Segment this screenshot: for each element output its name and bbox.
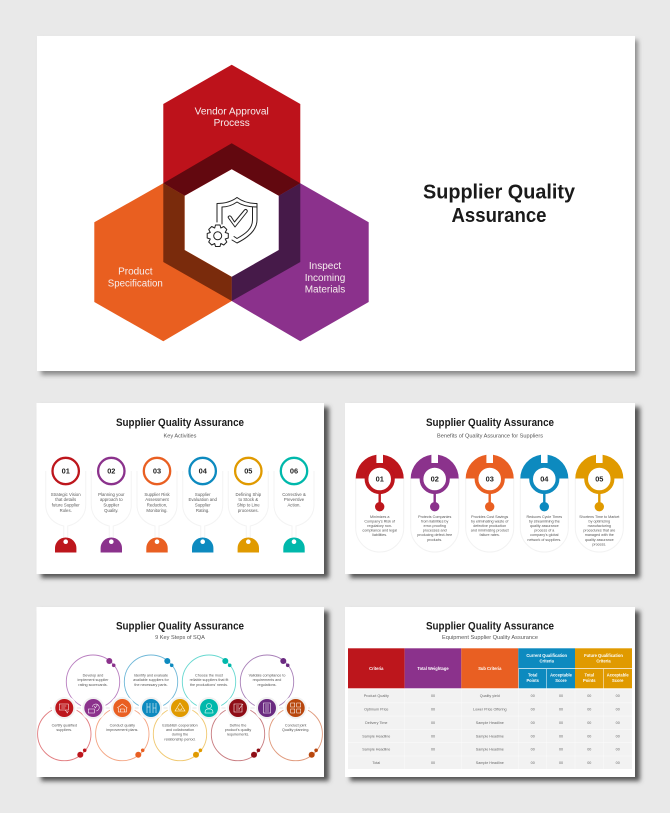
icon: joint planning grid [283,696,308,720]
hexagon: vendor approval process: Process [214,118,250,129]
icon: collaboration [168,696,192,720]
benefit 05: process. [592,542,606,546]
heading: benefits: Supplier Quality Assurance [426,417,554,429]
step ring: certify qualified suppliers: suppliers. [56,728,72,732]
row: sample headline a [362,734,620,738]
benefit 03 [466,455,514,552]
hexagon: inspect incoming materials: Inspect [309,261,341,272]
activity 04: 04 [199,467,208,476]
row: sample headline a: 00 [616,734,620,738]
step ring: develop rating scorecards [66,655,120,708]
icon: certificate [52,696,77,720]
activity 05: Ship to Line [237,502,260,508]
row: total [372,761,620,765]
benefit 01: Company's Risk of [364,520,396,524]
activity 02: approach to [100,497,123,502]
activity 03: Supplier Risk [144,492,171,497]
step ring: choose reliable suppliers: reliable suppliers that fit [190,678,228,682]
table header: Points [526,678,540,683]
activity 06: Action. [287,502,301,508]
benefit 02: from liabilities by [421,520,448,524]
heading: key activities: Key Activities [164,434,197,440]
benefit 02: error-proofing [424,524,446,528]
row: total: 00 [616,761,620,765]
benefit 02: products. [427,538,442,542]
heading: nine key steps: 9 Key Steps of SQA [155,635,205,641]
activity 01: Strategic Vision [51,492,81,497]
activity 04 [183,458,223,552]
row: sample headline b [362,748,620,752]
activity 05 [228,458,268,552]
benefit 04 [520,455,568,552]
row: sample headline b: 00 [616,748,620,752]
step ring: conduct joint planning [269,707,322,761]
panel: equipment table slide [345,607,640,781]
activity 02: Planning your [98,492,125,497]
step ring: validate compliance: Validate compliance to [249,674,285,678]
hexagon: product specification: Specification [108,278,163,290]
benefit 05: manufacturing [588,524,611,528]
row: product quality: Quality yield [480,694,500,698]
title: supplier quality assurance [423,182,576,227]
step ring: establish cooperation [153,707,207,761]
row: total: Sample Headline [476,761,504,765]
table header: Total Weightage [417,666,449,671]
activity 06: Corrective & [282,492,306,497]
activity 01: 01 [62,467,70,476]
step ring: conduct quality improvement [96,707,149,761]
table header: Criteria [596,658,611,664]
benefit 04: process of a [534,529,555,533]
row: product quality: 00 [531,694,535,698]
heading: equipment supplier [426,620,554,641]
step ring: develop rating scorecards: rating scorecards. [78,683,108,687]
table header: Acceptable [607,672,629,678]
step ring: identify and evaluate suppliers [124,655,178,708]
icon: quality building [110,696,135,720]
step ring: choose reliable suppliers [182,655,236,708]
benefit 02: producing defect-free [417,533,452,537]
step ring: identify and evaluate suppliers: Identify and evaluate [134,674,168,678]
activity 03: Reduction, [147,502,167,508]
benefit 05: Shortens Time to Market [579,515,619,519]
step ring: identify and evaluate suppliers: available suppliers for [133,678,170,682]
row: total: 00 [531,761,535,765]
row: optimum price: 00 [616,708,620,712]
row: delivery time: 00 [431,721,435,725]
step ring: establish cooperation: and collaboration [166,728,194,732]
row: product quality: 00 [559,694,563,698]
row: product quality: 00 [587,694,591,698]
row: optimum price: 00 [431,708,435,712]
activity 04: Supplier [195,502,211,508]
step ring: certify qualified suppliers [38,707,91,761]
center white hexagon [185,169,279,277]
row: delivery time: 00 [587,721,591,725]
benefit 03: and minimizing product [471,529,509,533]
overlap: dark orange segment [163,183,232,301]
row: delivery time [365,721,620,725]
overlap: dark purple segment [232,183,300,301]
row: delivery time: Delivery Time [365,721,387,725]
table header: Criteria [369,666,384,671]
activity 06 [274,458,314,552]
hexagon: product specification [94,183,232,341]
row: total: 00 [431,761,435,765]
panel: benefits slide [345,403,640,578]
benefit 04: 04 [540,475,549,484]
step ring: validate compliance: regulations. [257,683,277,687]
icon row: nine step badges [50,696,310,720]
panel: hexagon overview slide [37,36,638,375]
step ring: define quality requirements: product's quality [225,728,251,732]
heading: nine key steps: Supplier Quality Assurance [116,620,244,632]
row: sample headline b: 00 [431,748,435,752]
title: supplier quality assurance: Supplier Quality [423,182,576,204]
benefit 01: regulatory non- [367,524,393,528]
hexagon: inspect incoming materials: Incoming [305,273,345,284]
activity 06: 06 [290,467,298,476]
row: product quality: 00 [616,694,620,698]
hexagon: vendor approval process [163,65,300,223]
row: optimum price: 00 [587,708,591,712]
activity 02 [91,458,131,552]
benefit 03: defective production [473,524,506,528]
table header: Sub Criteria [478,666,502,671]
heading: nine key steps [116,620,244,641]
benefit 03: failure rates. [480,533,500,537]
table header: Total [585,672,594,678]
row: sample headline a: 00 [431,734,435,738]
table header: Score [555,678,567,683]
row: delivery time: 00 [559,721,563,725]
row: total: Total [372,761,380,765]
benefit 02: processes and [423,529,447,533]
overlap: dark red segment [163,143,300,196]
benefit 03: 03 [486,475,494,484]
row: optimum price [364,708,620,712]
activity 01: Roles. [60,508,72,513]
icon: scorecard [81,696,106,720]
heading: equipment supplier: Equipment Supplier Quality Assurance [442,635,538,641]
step ring: conduct joint planning: Quality planning. [282,728,309,732]
step ring: develop rating scorecards: implement supplier [78,678,109,682]
benefit 01 [356,455,404,552]
step ring: conduct quality improvement: improvement plans. [106,728,138,732]
row: optimum price: 00 [531,708,535,712]
icon: compliance checklist [254,696,280,720]
title: supplier quality assurance: Assurance [452,205,546,227]
row: sample headline b: Sample Headline [476,748,504,752]
activity 05: Defining Ship [236,492,262,497]
step ring: define quality requirements [211,707,265,761]
benefit 05 [575,455,623,552]
step ring: establish cooperation: Establish cooperation [162,724,198,728]
activity 04: Rating. [196,508,210,513]
benefit 04: network of suppliers. [527,538,561,542]
hexagon: product specification: Product [118,266,153,278]
step ring: define quality requirements: requirements. [227,733,249,737]
row: sample headline a: 00 [531,734,535,738]
heading: key activities: Supplier Quality Assurance [116,417,244,429]
row: sample headline a: 00 [559,734,563,738]
table header: Current Qualification [526,653,568,658]
step ring: choose reliable suppliers: Choose the most [195,674,223,678]
row: delivery time: 00 [531,721,535,725]
benefit 04: by streamlining the [529,520,560,524]
icon: supplier person [196,696,222,720]
benefit 03: by eliminating waste of [471,520,509,524]
step ring: identify and evaluate suppliers: the necessary parts. [134,683,168,687]
icon: requirements [226,696,250,720]
row: product quality: Product Quality [364,694,389,698]
activity 02: 02 [107,467,115,476]
activity 03: 03 [153,467,161,476]
row: optimum price: Optimum Price [364,708,388,712]
step ring: validate compliance: requirements and [253,678,281,682]
step ring: certify qualified suppliers: Certify qualified [52,724,77,728]
benefit 05: 05 [595,475,603,484]
benefit 02 [411,455,459,552]
panel: key activities slide [36,403,329,578]
hexagon: vendor approval process: Vendor Approval [195,106,269,118]
step ring: conduct joint planning: Conduct joint [285,724,306,728]
table header: Future Qualification [584,653,623,658]
activity 06: Preventive [284,497,305,502]
activity 02: Quality. [104,508,118,513]
benefit 05: managed with the [585,533,614,537]
row: sample headline a: Sample Headline [362,734,390,738]
step ring: choose reliable suppliers: the productions' needs. [190,683,228,687]
benefit 01: Minimizes a [370,515,390,519]
table header: Total [528,672,537,678]
heading: benefits [426,417,554,440]
activity 04: Supplier [195,492,211,497]
row: optimum price: 00 [559,708,563,712]
activity 04: Evaluation and [188,497,218,502]
benefit 04: company's global [530,533,559,537]
benefit 05: by optimizing [589,520,610,524]
step ring: conduct quality improvement: Conduct quality [110,724,135,728]
benefit 01: compliance and legal [362,529,397,533]
icon: shield with check and gear [207,198,257,246]
benefit 04: quality assurance [530,524,559,528]
benefit 04: Reduces Cycle Times [526,515,562,519]
benefit 02: Protects Companies [418,515,451,519]
table body [348,689,632,769]
row: sample headline b: 00 [587,748,591,752]
table header: Score [612,678,624,683]
activity 01 [46,458,86,552]
step ring: define quality requirements: Define the [230,724,246,728]
panel: nine key steps slide [36,607,329,781]
activity 03: Monitoring. [146,508,168,513]
step ring: establish cooperation: during the [172,733,188,737]
benefit 02: 02 [431,475,439,484]
activity 05: processes. [238,508,259,513]
row: optimum price: Lower Price Offering [473,708,507,712]
heading: equipment supplier: Supplier Quality Assurance [426,620,554,632]
row: total: 00 [559,761,563,765]
benefit 05: procedures that are [583,529,615,533]
row: sample headline a: Sample Headline [476,734,504,738]
hexagon: inspect incoming materials: Materials [305,284,345,296]
benefit 03: Provides Cost Savings [471,515,508,519]
row: sample headline b: 00 [559,748,563,752]
step ring: develop rating scorecards: Develop and [83,674,103,678]
step ring: establish cooperation: relationship period. [164,737,196,741]
row: product quality: 00 [431,694,435,698]
benefit 01: 01 [376,475,384,484]
table header: Points [583,678,596,683]
benefit 05: quality assurance [585,538,614,542]
step ring: validate compliance [240,655,294,708]
activity 02: Supplier [103,502,120,508]
activity 05: to Stock & [239,497,258,502]
hexagon: inspect incoming materials [232,183,369,341]
table header [348,648,632,688]
benefit 01: liabilities. [372,533,387,537]
row: sample headline b: Sample Headline [362,748,390,752]
activity 01: that details [55,497,76,502]
row: product quality [364,694,620,698]
row: sample headline b: 00 [531,748,535,752]
activity 05: 05 [244,467,252,476]
row: delivery time: 00 [616,721,620,725]
icon: evaluate parts [138,696,164,720]
row: delivery time: Sample Headline [476,721,504,725]
heading: key activities [116,417,244,440]
table header: Acceptable [550,672,573,678]
activity 03: Assessment [145,497,170,502]
activity 01: future Supplier [52,502,80,508]
row: sample headline a: 00 [587,734,591,738]
heading: benefits: Benefits of Quality Assurance for Suppliers [437,434,543,440]
row: total: 00 [587,761,591,765]
table header: Criteria [540,658,555,664]
activity 03 [137,458,177,552]
